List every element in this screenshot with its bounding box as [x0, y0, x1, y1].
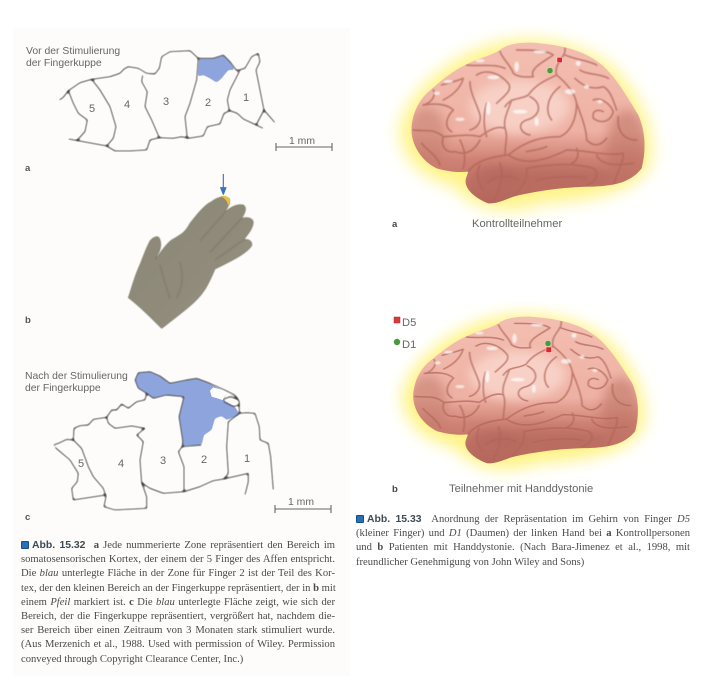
label b right: b	[392, 484, 398, 495]
caption dystonia: Teilnehmer mit Handdystonie	[449, 483, 593, 495]
hand shape	[128, 197, 253, 328]
scale bar c	[275, 497, 331, 513]
caption Abb. 15.32: Die blau unterlegte Fläche in der Zone für Finger 2 ist der Teil des Kor-	[21, 568, 335, 579]
label c: c	[25, 512, 30, 523]
marker D1 b	[545, 340, 551, 346]
heading: after stimulation: der Fingerkuppe	[25, 383, 101, 394]
caption Abb. 15.33: und b Patienten mit Handdystonie. (Nach Bara-Jimenez et al., 1998, mit	[356, 542, 690, 553]
zone numbers c: 1	[244, 453, 250, 465]
page tint	[13, 28, 350, 676]
scale bar c: 1 mm	[288, 497, 314, 508]
brain illustration	[407, 43, 647, 203]
caption control: Kontrollteilnehmer	[472, 218, 562, 230]
label a right: a	[392, 219, 398, 230]
heading: before stimulation: der Fingerkuppe	[26, 58, 102, 69]
caption Abb. 15.32	[21, 540, 336, 664]
zone outlines	[59, 51, 275, 151]
blue area finger 2	[198, 55, 235, 83]
legend D5: D5	[402, 317, 416, 329]
label a: a	[25, 163, 31, 174]
scale bar a: 1 mm	[289, 136, 315, 147]
fingertip highlight	[221, 196, 230, 206]
zone numbers c	[78, 453, 250, 470]
panel a: cortex map before stimulation	[59, 51, 275, 151]
marker D5	[557, 57, 562, 63]
panel c: cortex map after stimulation	[53, 372, 273, 510]
zone numbers c: 5	[78, 458, 84, 470]
panel b: hand	[128, 174, 253, 328]
caption Abb. 15.32: einem Pfeil markiert ist. c Die blau unterlegte Fläche zeigt, wie sich der	[21, 597, 335, 608]
zone numbers a: 2	[205, 97, 211, 109]
zone numbers c: 4	[118, 458, 124, 470]
white island	[210, 387, 227, 400]
hand shading	[160, 213, 244, 298]
yellow glow	[401, 40, 651, 210]
blue expanded area	[135, 372, 240, 446]
caption Abb. 15.33: Abb. 15.33 Anordnung der Repräsentation im Gehirn von Finger D5	[367, 514, 690, 525]
caption Abb. 15.32: tex, der den kleinen Bereich an der Fingerkuppe repräsentiert, der in b mit	[21, 583, 336, 594]
legend D1: D1	[402, 339, 416, 351]
zone numbers a: 3	[163, 96, 169, 108]
legend	[394, 317, 416, 351]
scale bar a	[276, 136, 332, 151]
panel: control brain	[401, 40, 651, 210]
marker D5 b	[546, 347, 552, 352]
arrow	[221, 174, 226, 194]
zone numbers a: 1	[243, 92, 249, 104]
zone numbers a: 5	[89, 103, 95, 115]
panel: dystonia brain	[403, 314, 644, 469]
caption Abb. 15.32: (Aus Merzenich et al., 1988. Used with permission of Wiley. Permission	[21, 639, 335, 650]
caption Abb. 15.33: freundlicher Genehmigung von John Wiley and Sons)	[356, 557, 584, 568]
label b left: b	[25, 315, 31, 326]
zone numbers c: 3	[160, 455, 166, 467]
caption Abb. 15.32: conveyed through Copyright Clearance Center, Inc.)	[21, 654, 243, 664]
marker D1	[547, 68, 553, 74]
caption Abb. 15.33: (kleiner Finger) und D1 (Daumen) der linken Hand bei a Kontrollpersonen	[356, 528, 690, 539]
yellow glow	[403, 314, 644, 469]
caption Abb. 15.33	[356, 514, 690, 568]
heading: after stimulation: Nach der Stimulierung	[25, 371, 128, 382]
zone numbers a: 4	[124, 99, 130, 111]
caption Abb. 15.32: Abb. 15.32 a Jede nummerierte Zone repräsentiert den Bereich im	[32, 540, 335, 551]
caption Abb. 15.32: Bereich, der die Fingerkuppe repräsentiert, vergrößert hat, nachdem die-	[21, 611, 335, 622]
brain illustration	[409, 317, 640, 463]
caption Abb. 15.32: ser Bereich über einen Zeitraum von 3 Monaten stark stimuliert wurde.	[21, 625, 335, 636]
caption Abb. 15.32: somatosensorischen Kortex, der einem der 5 Finger des Affen entspricht.	[21, 554, 335, 565]
zone numbers c: 2	[201, 454, 207, 466]
heading: before stimulation: Vor der Stimulierung	[26, 46, 120, 57]
zone outlines	[53, 372, 273, 510]
zone numbers a	[89, 92, 249, 115]
